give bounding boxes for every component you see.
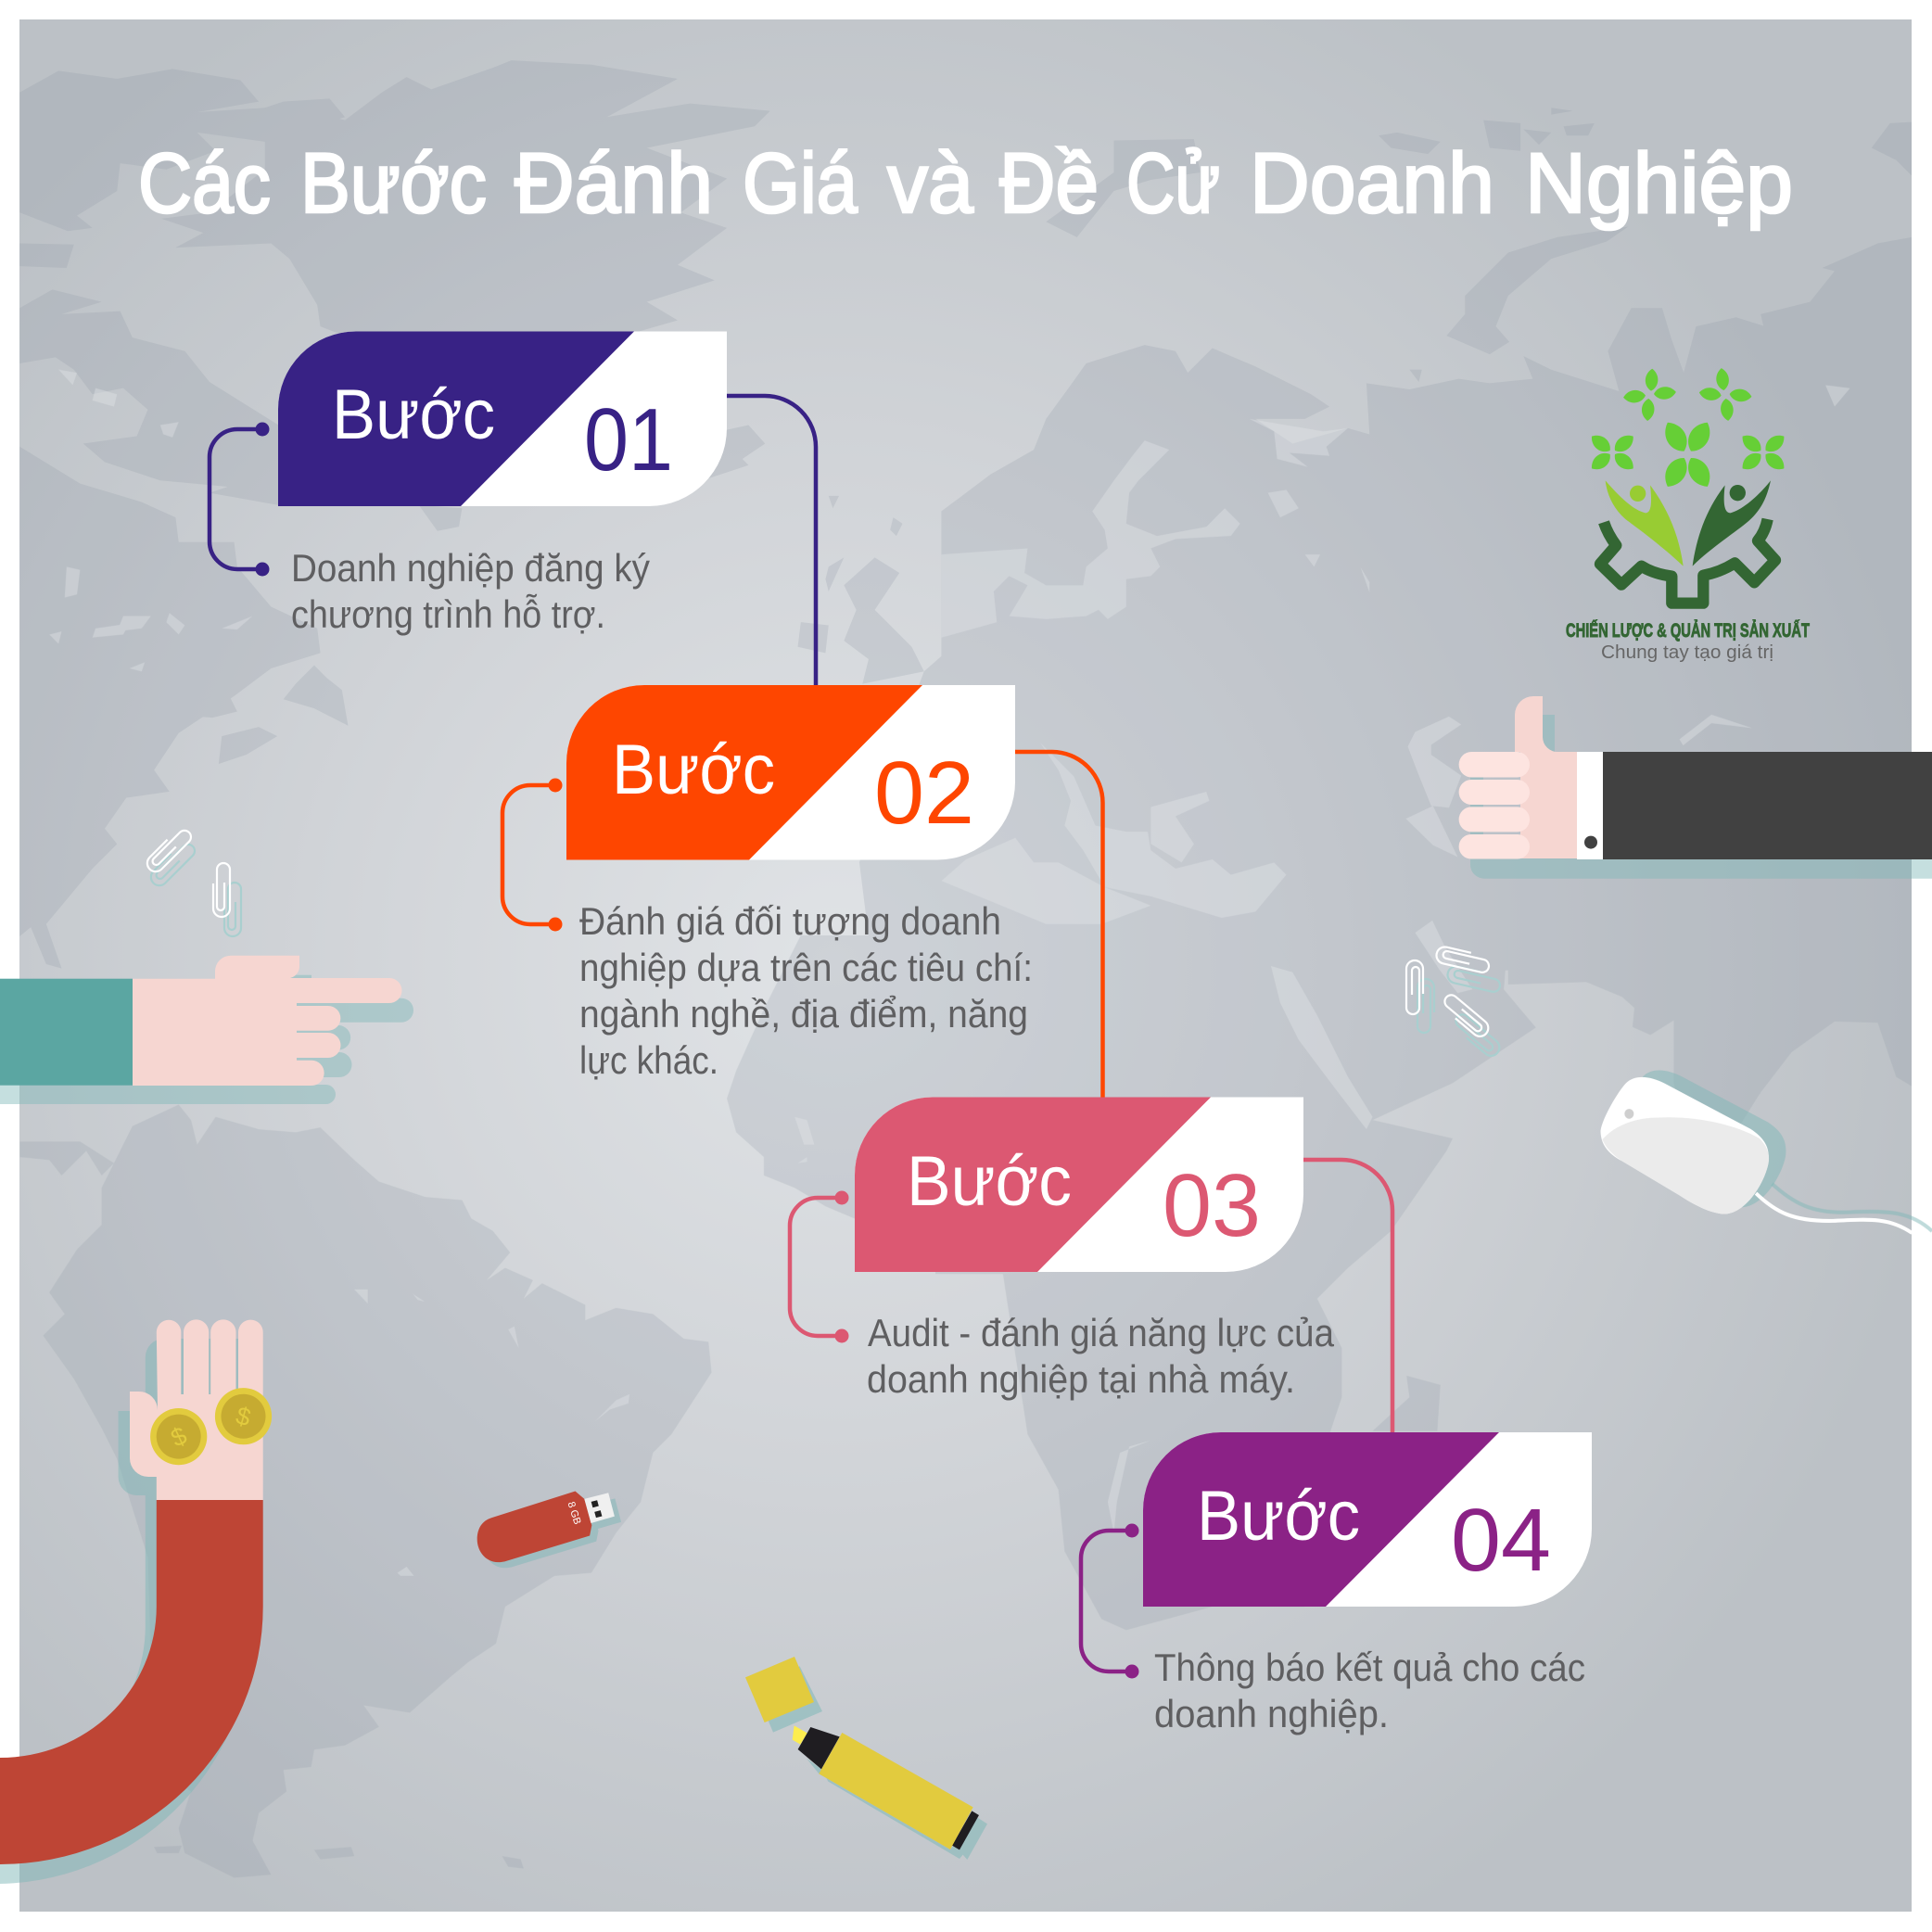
connector: step 1 to step 2 bbox=[727, 396, 816, 685]
icon: highlighter bbox=[745, 1657, 987, 1860]
icon: usb drive: 8 GB bbox=[565, 1501, 583, 1526]
logo tagline: Chung tay tạo giá trị bbox=[1601, 642, 1773, 663]
title: Nghiệp bbox=[1525, 136, 1793, 231]
icon: usb drive bbox=[477, 1492, 621, 1568]
text: step 4 description: doanh nghiệp. bbox=[1154, 1692, 1389, 1735]
title: Đánh bbox=[515, 136, 713, 231]
title: Bước bbox=[300, 136, 487, 231]
bracket: step 2 bbox=[502, 779, 562, 931]
bracket: step 4 bbox=[1081, 1524, 1138, 1678]
icon: paperclips right bbox=[1406, 946, 1503, 1060]
panel: step 3 bbox=[790, 1098, 1335, 1401]
icon: pointing hand bbox=[0, 956, 413, 1104]
title: Các bbox=[138, 136, 271, 231]
card: step 3: Bước bbox=[907, 1142, 1072, 1221]
icon: arm with open hand and coins bbox=[0, 1319, 272, 1884]
text: step 2 description: Đánh giá đối tượng doanh bbox=[579, 899, 1001, 943]
panel: step 2 bbox=[502, 685, 1033, 1082]
card: step 3 bbox=[855, 1098, 1303, 1272]
text: step 1 description bbox=[291, 546, 650, 636]
title: và bbox=[887, 136, 974, 231]
icon: arm with open hand and coins: $ bbox=[233, 1402, 254, 1431]
logo bbox=[1566, 367, 1810, 663]
text: step 3 description: doanh nghiệp tại nhà máy. bbox=[867, 1357, 1295, 1401]
title: Giá bbox=[743, 136, 858, 231]
text: step 2 description: nghiệp dựa trên các tiêu chí: bbox=[579, 946, 1033, 989]
title: Đề bbox=[999, 136, 1099, 231]
title: Cử bbox=[1126, 136, 1220, 231]
logo name: CHIẾN LƯỢC & QUẢN TRỊ SẢN XUẤT bbox=[1566, 620, 1810, 642]
card: step 1: Bước bbox=[332, 375, 495, 454]
text: step 1 description: Doanh nghiệp đăng ký bbox=[291, 546, 650, 590]
connector: step 2 to step 3 bbox=[1015, 752, 1103, 1098]
bracket: step 1 bbox=[210, 423, 269, 577]
icon: paperclips left bbox=[144, 825, 241, 936]
icon: thumbs up hand bbox=[1459, 696, 1932, 879]
text: step 3 description bbox=[867, 1311, 1335, 1401]
text: step 2 description: lực khác. bbox=[579, 1038, 718, 1082]
title: Doanh bbox=[1250, 136, 1494, 231]
card: step 4: 04 bbox=[1451, 1491, 1551, 1590]
icon: computer mouse bbox=[1601, 1071, 1932, 1233]
text: step 2 description bbox=[579, 899, 1033, 1082]
card: step 4: Bước bbox=[1197, 1477, 1360, 1556]
panel: step 1 bbox=[210, 332, 727, 636]
card: step 3: 03 bbox=[1163, 1156, 1261, 1255]
text: step 1 description: chương trình hỗ trợ. bbox=[291, 592, 605, 636]
card: step 4 bbox=[1143, 1432, 1592, 1607]
logo mark bbox=[1588, 367, 1788, 604]
title bbox=[138, 136, 1793, 231]
card: step 1 bbox=[278, 332, 727, 506]
card: step 2: Bước bbox=[612, 731, 775, 809]
text: step 3 description: Audit - đánh giá năng lực của bbox=[868, 1311, 1335, 1354]
panel: step 4 bbox=[1081, 1432, 1592, 1735]
icon: arm with open hand and coins: $ bbox=[167, 1421, 191, 1453]
bracket: step 3 bbox=[790, 1190, 849, 1342]
card: step 2 bbox=[566, 685, 1015, 860]
text: step 4 description bbox=[1154, 1646, 1585, 1735]
card: step 2: 02 bbox=[874, 744, 974, 843]
text: step 2 description: ngành nghề, địa điểm, năng bbox=[579, 992, 1028, 1036]
text: step 4 description: Thông báo kết quả cho các bbox=[1154, 1646, 1585, 1689]
connector: step 3 to step 4 bbox=[1303, 1160, 1392, 1432]
card: step 1: 01 bbox=[584, 390, 673, 489]
